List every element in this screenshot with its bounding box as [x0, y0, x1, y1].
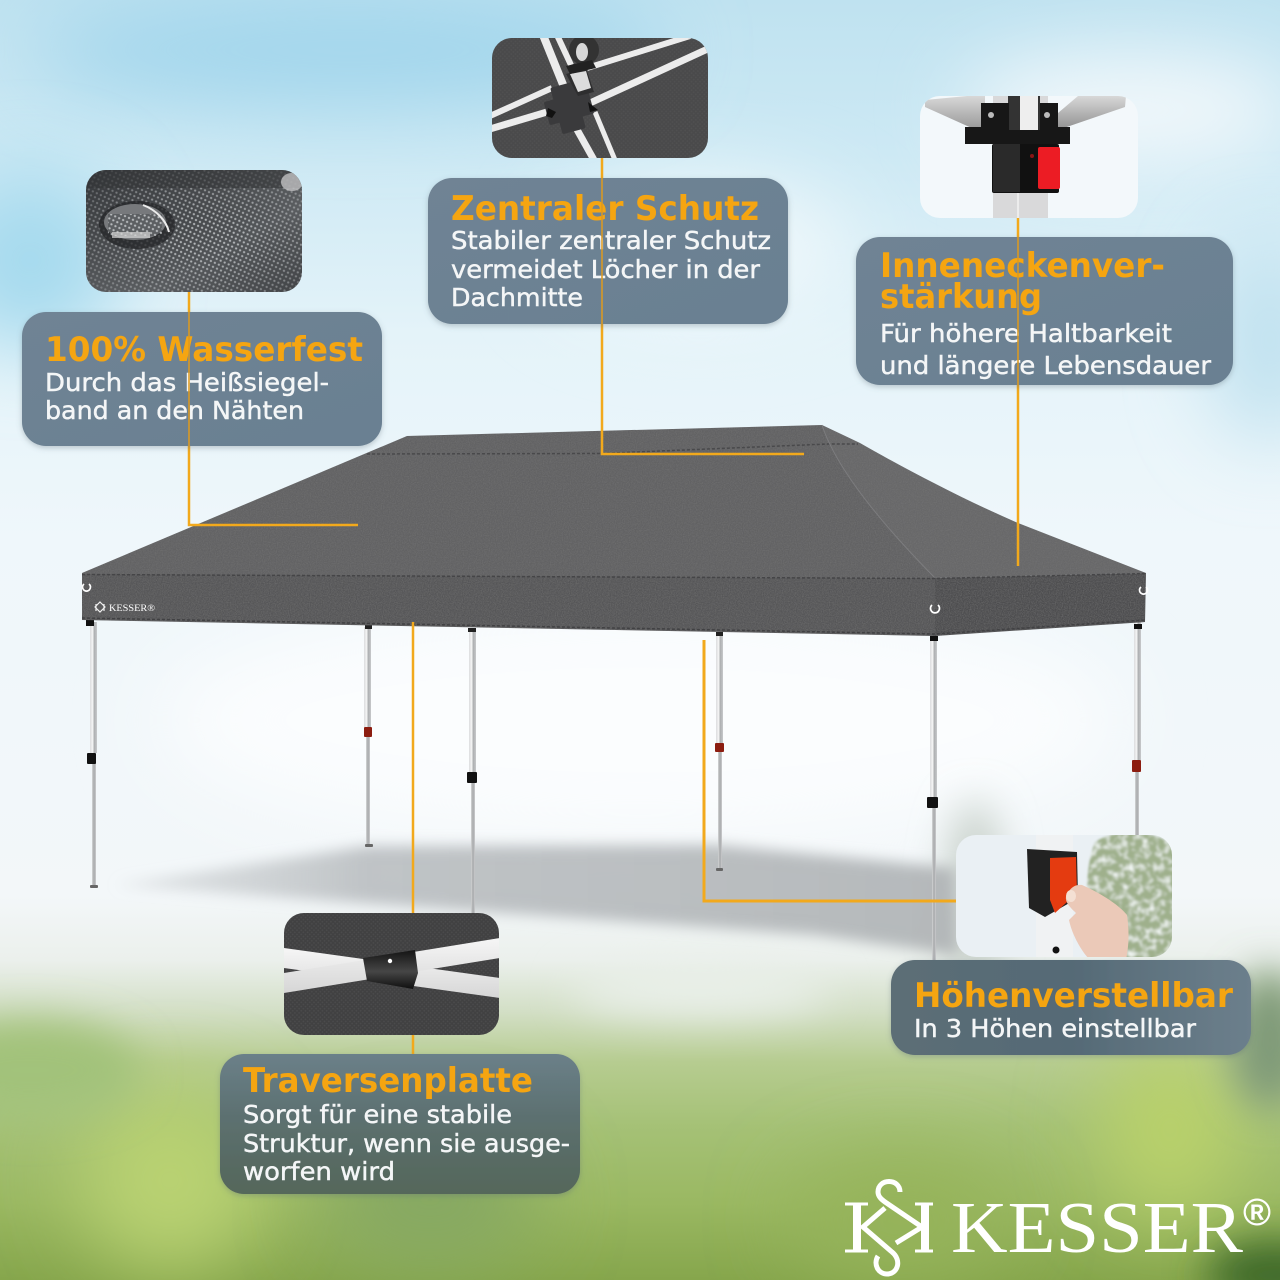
icon: hooks — [83, 584, 1148, 613]
thumbnail: cross joint of the frame — [284, 913, 500, 1035]
thumbnail: hand pressing red height button — [956, 835, 1172, 957]
description: worfen wird — [243, 1157, 395, 1186]
leader lines — [189, 158, 1018, 1058]
heading: Traversenplatte — [243, 1061, 533, 1101]
description: vermeidet Löcher in der — [451, 255, 761, 284]
panel: inner corner reinforcement — [856, 237, 1233, 385]
description: Dachmitte — [451, 283, 583, 312]
canopy fabric surfaces — [82, 425, 1146, 636]
panel: waterproof — [22, 312, 382, 446]
panel: central protection — [428, 178, 788, 324]
thumbnail: inner corner bracket with red button — [920, 96, 1138, 218]
description — [880, 319, 1212, 380]
heading: 100% Wasserfest — [45, 330, 363, 370]
ground shadow of the tent — [115, 845, 958, 955]
heading — [880, 246, 1165, 317]
description: Für höhere Haltbarkeit — [880, 319, 1172, 348]
description: Stabiler zentraler Schutz — [451, 226, 771, 255]
heading: Inneneckenver- — [880, 246, 1165, 286]
brand logo — [845, 1182, 1271, 1274]
description: Durch das Heißsiegel- — [45, 368, 329, 397]
thumbnail: water droplet on fabric — [86, 170, 303, 292]
description: Struktur, wenn sie ausge- — [243, 1129, 570, 1158]
heading: Höhenverstellbar — [914, 976, 1233, 1016]
heading: stärkung — [880, 277, 1042, 317]
icon: KESSER monogram — [845, 1182, 933, 1274]
description — [451, 226, 771, 312]
tent canopy — [82, 425, 1148, 636]
panel: height adjustable — [891, 960, 1251, 1055]
description — [243, 1100, 570, 1186]
tent legs — [86, 620, 1142, 961]
small brand print on tent: KESSER® — [109, 603, 155, 614]
description: band an den Nähten — [45, 396, 304, 425]
description — [45, 368, 329, 425]
heading: Zentraler Schutz — [451, 189, 759, 229]
description: Sorgt für eine stabile — [243, 1100, 512, 1129]
wordmark: KESSER — [951, 1187, 1243, 1268]
panel: cross plate — [220, 1054, 580, 1194]
thumbnail: central hub of the frame — [490, 35, 712, 160]
small brand print on tent — [95, 602, 155, 614]
registered mark: ® — [1243, 1192, 1271, 1234]
description: und längere Lebensdauer — [880, 351, 1212, 380]
description: In 3 Höhen einstellbar — [914, 1014, 1197, 1043]
